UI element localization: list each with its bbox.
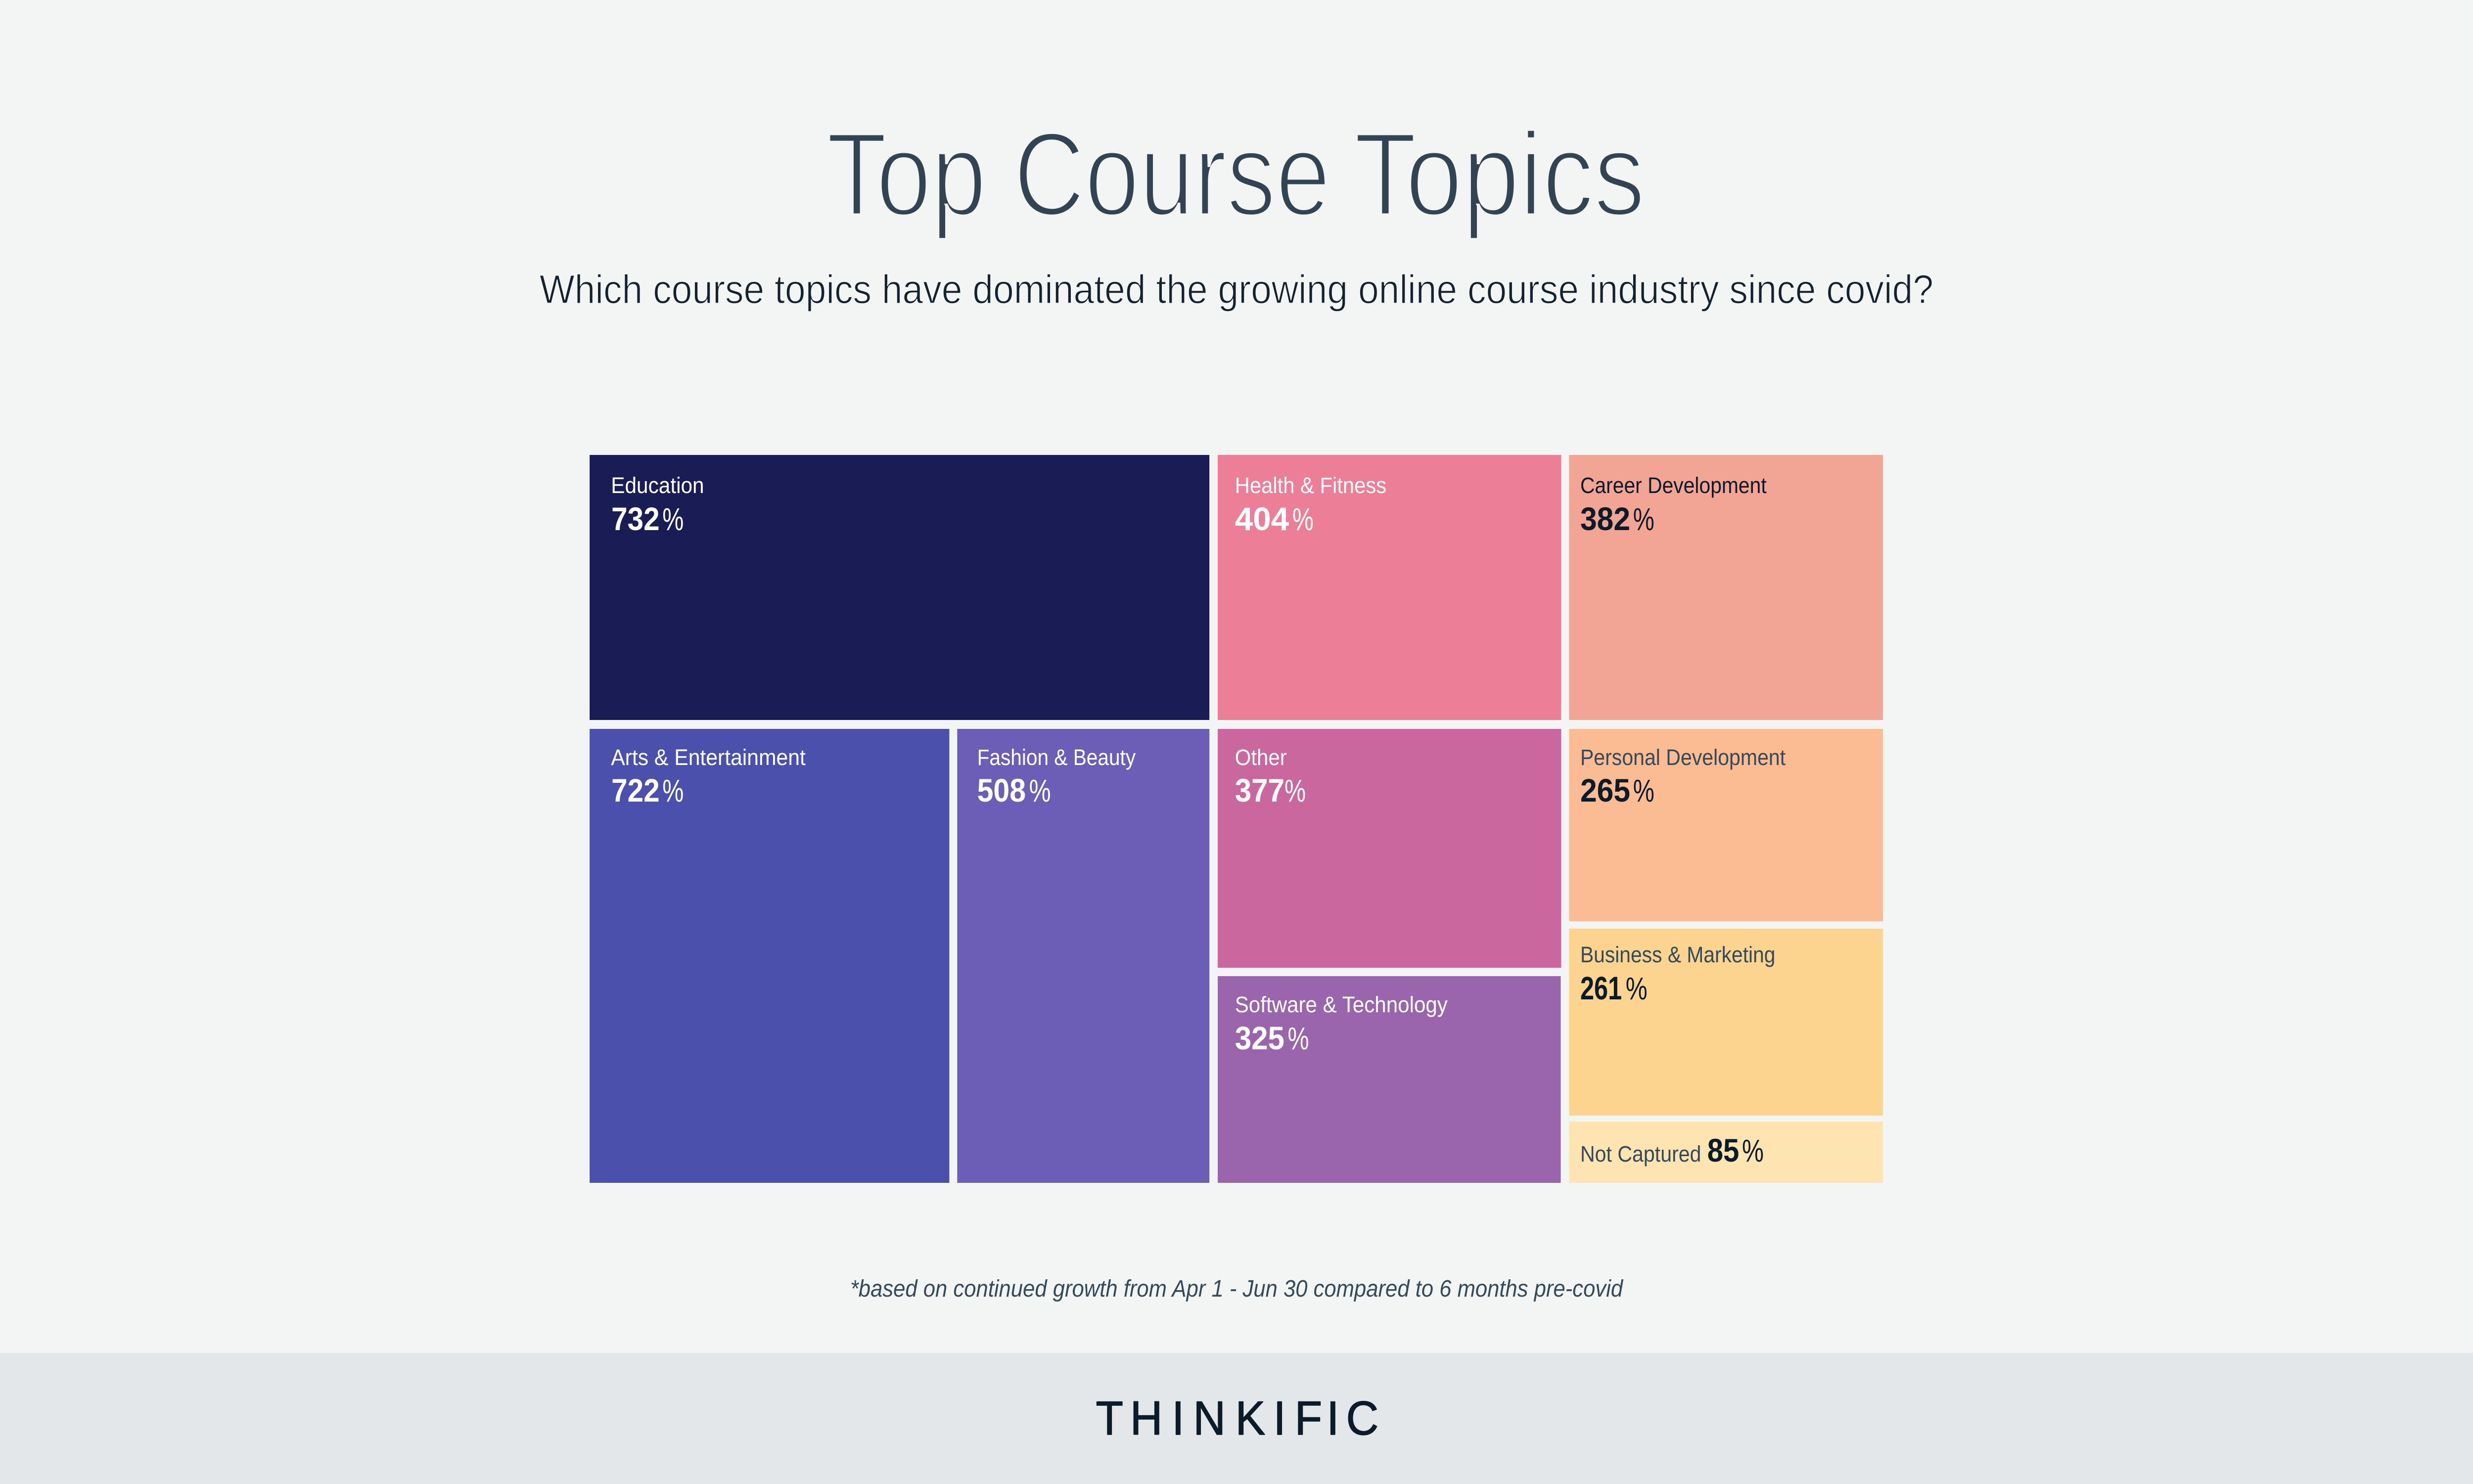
value: 732%: 732 <box>611 500 660 537</box>
label: education: Education <box>611 474 704 498</box>
label: fashion and beauty: Fashion & Beauty <box>977 746 1136 770</box>
value: 265%: 265 <box>1580 772 1630 809</box>
value: 377%: % <box>1284 773 1306 809</box>
value: 325% <box>1235 1020 1309 1056</box>
value: 508% <box>977 772 1051 809</box>
tile: fashion and beauty <box>957 729 1209 1183</box>
treemap chart <box>590 455 1883 1183</box>
tile: health and fitness <box>1218 455 1561 720</box>
tile: arts and entertainment <box>590 729 949 1183</box>
value: 261%: % <box>1626 971 1648 1006</box>
label: arts and entertainment: Arts & Entertainment <box>611 746 806 770</box>
label: career development: Career Development <box>1580 474 1767 498</box>
value: 85% <box>1707 1132 1764 1169</box>
value: 325%: 325 <box>1235 1020 1284 1056</box>
value: 85%: % <box>1742 1133 1764 1169</box>
label: software and technology: Software & Technology <box>1235 993 1448 1017</box>
tile: career development <box>1569 455 1883 720</box>
label: other: Other <box>1235 746 1287 770</box>
value: 377%: 377 <box>1235 772 1284 809</box>
logo: thinkific: THINKIFIC <box>1096 1391 1378 1445</box>
label: health and fitness: Health & Fitness <box>1235 474 1386 498</box>
label: not captured: Not Captured <box>1580 1142 1701 1167</box>
value: 508%: % <box>1029 773 1051 809</box>
tile: not captured <box>1569 1122 1883 1183</box>
value: 325%: % <box>1288 1021 1309 1056</box>
label: business and marketing: Business & Marketing <box>1580 943 1776 967</box>
label: personal development: Personal Development <box>1580 746 1786 770</box>
value: 508%: 508 <box>977 772 1026 809</box>
subtitle: Which course topics have dominated the growing online course industry since covid? <box>540 267 1933 312</box>
tile: software and technology <box>1218 976 1561 1183</box>
tile: business and marketing <box>1569 929 1883 1116</box>
value: 404%: 404 <box>1235 500 1289 537</box>
value: 404%: % <box>1292 502 1314 537</box>
title: Course <box>1014 108 1330 241</box>
tile: other <box>1218 729 1561 968</box>
title <box>826 108 1645 241</box>
title: Topics <box>1354 108 1645 241</box>
title: Top <box>826 108 986 241</box>
value: 722%: % <box>662 773 684 809</box>
value: 732%: % <box>662 502 684 537</box>
value: 404% <box>1235 500 1314 537</box>
tile: personal development <box>1569 729 1883 921</box>
footer band <box>0 1353 2473 1484</box>
value: 382%: 382 <box>1580 500 1630 537</box>
value: 722%: 722 <box>611 772 660 809</box>
value: 85%: 85 <box>1707 1132 1739 1169</box>
value: 261%: 261 <box>1580 970 1622 1006</box>
value: 382%: % <box>1633 502 1654 537</box>
footnote: *based on continued growth from Apr 1 - Jun 30 compared to 6 months pre-covid <box>850 1275 1624 1302</box>
value: 265% <box>1580 772 1654 809</box>
value: 382% <box>1580 500 1654 537</box>
tile: education <box>590 455 1209 720</box>
value: 265%: % <box>1633 773 1654 809</box>
